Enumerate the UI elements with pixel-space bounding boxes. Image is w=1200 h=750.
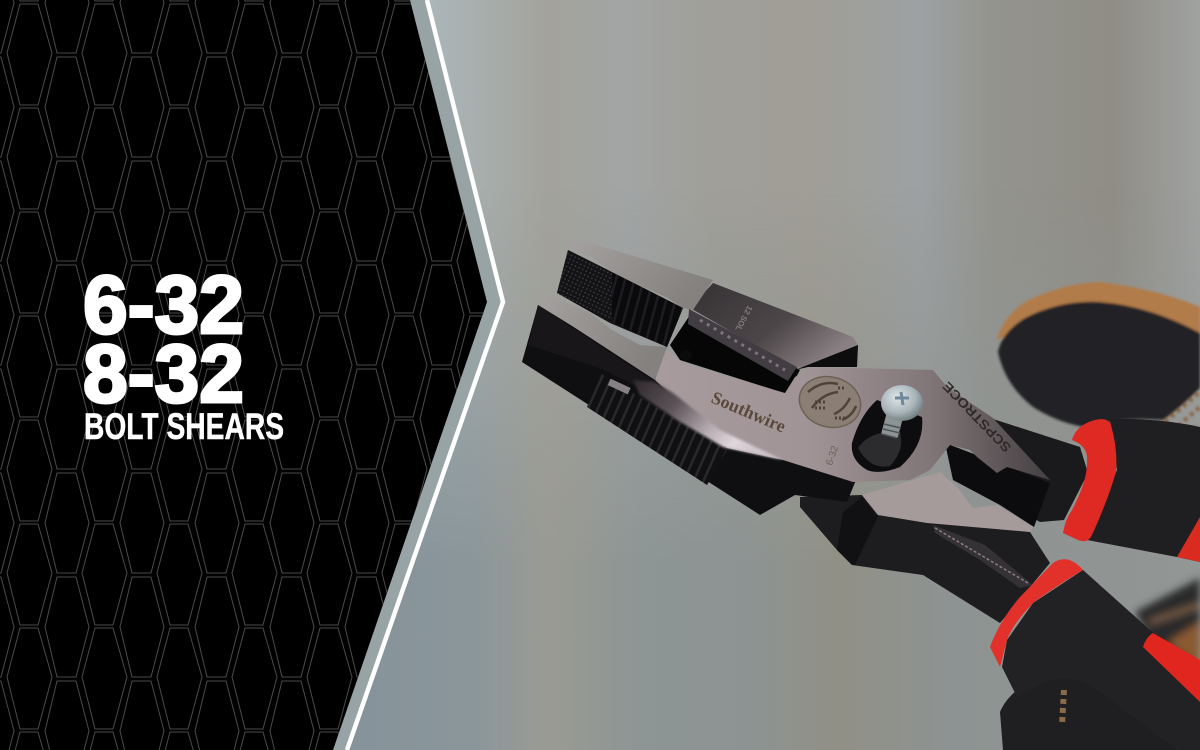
black fingertip (998, 302, 1200, 428)
stitching (1165, 392, 1200, 422)
lower jaw black body (522, 305, 856, 515)
red stripe (1177, 517, 1200, 562)
photo background (330, 0, 1200, 750)
upper jaw grip face (557, 250, 683, 347)
screw hole (852, 400, 922, 472)
gloved hand, upper finger (997, 282, 1200, 454)
inner black throat (670, 315, 800, 394)
pliers (522, 239, 1088, 623)
size 6-32: 6-32 (83, 258, 244, 351)
bolt screw (881, 385, 923, 438)
lower glove (1000, 670, 1177, 750)
southwire wordmark: Southwire (708, 387, 789, 436)
red ring (990, 559, 1083, 667)
lower silver jaw (862, 472, 1033, 532)
white chevron line (347, 0, 503, 750)
red stripe (1143, 633, 1200, 702)
black hexagon panel (0, 0, 500, 750)
inner black teeth (945, 443, 1050, 527)
shaft stamp: SCPSTROCE (939, 378, 1014, 455)
lower handle grip (990, 559, 1200, 750)
leather cuff behind grip (1178, 426, 1200, 454)
heading: bolt sizes and label (83, 258, 284, 447)
lower jaw plate (655, 350, 1050, 482)
lower handle metal (800, 495, 1050, 623)
grip (1002, 570, 1200, 750)
round logo badge (794, 370, 866, 434)
upper jaw chipped ridge (688, 309, 797, 381)
pale chevron band (333, 0, 505, 750)
notch at jaw pivot (680, 350, 692, 360)
glove behind lower handle (1135, 578, 1200, 700)
leather finger edge (997, 282, 1200, 340)
red ring (1063, 419, 1116, 541)
engraved marks: 12 SOL (733, 304, 754, 333)
size stamp: 6-32 (824, 444, 841, 467)
upper handle grip (1063, 419, 1200, 562)
label bolt shears: BOLT SHEARS (84, 406, 284, 447)
upper jaw plate (690, 283, 858, 368)
lit bevel on lower jaw (633, 380, 783, 460)
lower jaw silver edge (540, 292, 667, 380)
upper handle metal (990, 418, 1088, 522)
upper jaw silver edge (570, 239, 713, 310)
size 8-32: 8-32 (83, 327, 244, 420)
